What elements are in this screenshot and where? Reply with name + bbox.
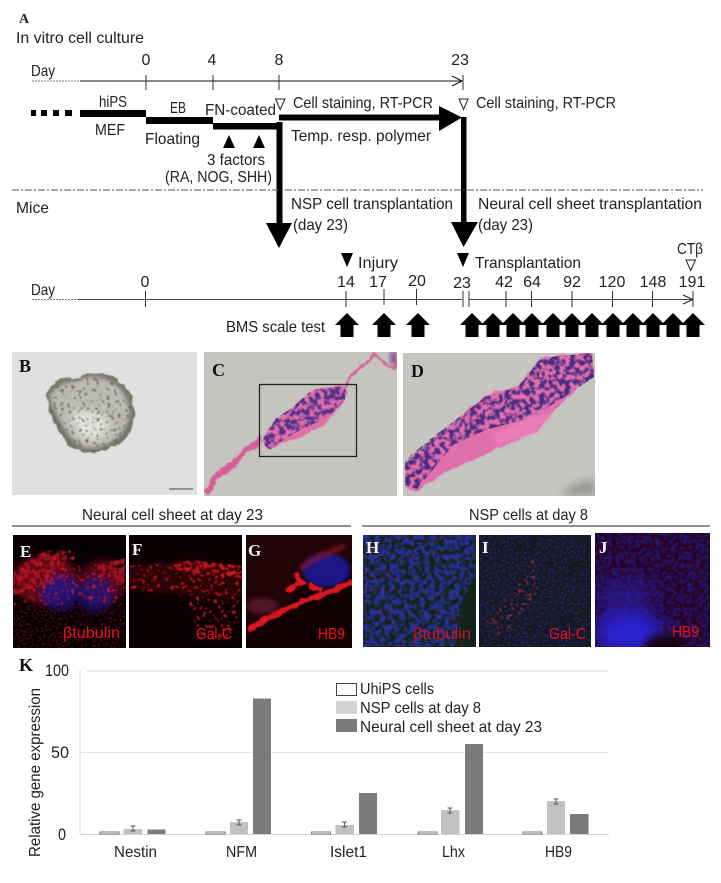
category labels: HB9: [545, 844, 572, 861]
mouse day axis: Day: [31, 282, 55, 299]
panel H: beta tubulin stain day 8: [363, 535, 476, 647]
three factors markers: (RA, NOG, SHH): [165, 169, 272, 186]
panel G: HB9 stain: [246, 535, 352, 648]
mouse day axis: 0: [141, 274, 150, 291]
inset box: [260, 384, 356, 456]
culture stage labels: Temp. resp. polymer: [291, 128, 432, 145]
staining at day 8: Cell staining, RT-PCR: [293, 95, 433, 112]
letter I: I: [482, 538, 489, 557]
letter B: B: [19, 356, 31, 376]
mouse day axis: 64: [523, 274, 541, 291]
three factors markers: 3 factors: [207, 152, 265, 169]
panel B: embryoid body micrograph: [12, 352, 197, 495]
mouse day axis: 92: [563, 274, 581, 291]
mouse day axis: 120: [599, 274, 625, 291]
culture stage labels: hiPS: [99, 94, 127, 111]
three factors markers: [165, 135, 272, 186]
injury marker: Injury: [358, 255, 398, 272]
CT beta marker: CTβ: [677, 241, 703, 258]
mouse day axis: 23: [453, 275, 471, 292]
category labels: Islet1: [330, 844, 367, 861]
in vitro day axis: Day: [31, 63, 55, 80]
letter G: G: [248, 541, 261, 560]
panel D: magnified stained section: [403, 353, 595, 496]
mouse day axis: 17: [369, 274, 387, 291]
transplantation marker: Transplantation: [475, 255, 581, 272]
letter E: E: [20, 542, 31, 561]
letter K: K: [19, 655, 33, 675]
culture stage labels: EB: [170, 100, 186, 117]
culture stage labels: [95, 94, 432, 148]
sheet transplantation label: [478, 196, 702, 234]
error bars: [130, 799, 558, 831]
bars: UhiPS cells: [100, 832, 542, 834]
panel F: Gal-C stain: [129, 535, 242, 648]
in vitro day axis: 4: [208, 52, 217, 69]
letter C: C: [212, 360, 225, 380]
panel E: beta tubulin stain: [13, 535, 126, 648]
legend: UhiPS cells: [360, 681, 434, 698]
panel I: Gal-C stain day 8: [479, 535, 591, 647]
NSP transplantation label: NSP cell transplantation: [291, 196, 453, 213]
sheet transplantation label: Neural cell sheet transplantation: [478, 196, 702, 213]
NSP transplantation label: (day 23): [293, 217, 348, 234]
panel letter A: A: [19, 12, 30, 27]
label: HB9: HB9: [672, 624, 699, 641]
bars: neural cell sheet at day 23: [148, 698, 588, 834]
letter D: D: [411, 361, 424, 381]
label: Gal-C: Gal-C: [196, 626, 232, 643]
arrow: neural cell sheet transplantation: [451, 117, 478, 247]
y axis: 50: [51, 743, 69, 762]
sheet transplantation label: (day 23): [478, 217, 533, 234]
mouse day axis: 191: [679, 274, 705, 291]
category labels: NFM: [226, 844, 257, 861]
label: beta tubulin: βtubulin: [413, 626, 471, 643]
y axis: Relative gene expression: [27, 688, 44, 857]
category labels: Lhx: [442, 844, 465, 861]
panel J: HB9 stain day 8: [595, 533, 710, 647]
CT beta marker: [677, 241, 703, 270]
staining at day 23: Cell staining, RT-PCR: [476, 95, 616, 112]
legend: Neural cell sheet at day 23: [360, 719, 542, 736]
NSP transplantation label: [291, 196, 453, 234]
panel A: experimental timeline: [12, 12, 705, 337]
legend: [336, 681, 542, 736]
y axis: [27, 661, 609, 857]
culture stage labels: MEF: [95, 122, 125, 139]
section heading: neural cell sheet: Neural cell sheet at day 23: [82, 507, 263, 524]
heading: mice: Mice: [16, 200, 49, 217]
mouse day axis: 148: [640, 274, 666, 291]
injury marker: [341, 253, 398, 272]
mouse day axis: [31, 273, 705, 307]
culture stage labels: Floating: [145, 131, 200, 148]
BMS test block arrows: [335, 313, 705, 337]
heading: in vitro cell culture: In vitro cell culture: [16, 30, 144, 47]
culture stage labels: FN-coated: [205, 102, 276, 119]
section heading: NSP cells: NSP cells at day 8: [469, 507, 588, 524]
y axis: 0: [58, 825, 66, 844]
label: HB9: HB9: [318, 626, 345, 643]
category labels: [114, 844, 572, 861]
label: Gal-C: Gal-C: [549, 626, 586, 643]
in vitro day axis: 8: [275, 52, 284, 69]
panel K: gene expression bar chart: [19, 655, 609, 861]
label: beta tubulin: βtubulin: [63, 625, 120, 642]
in vitro day axis: 23: [451, 52, 469, 69]
mouse day axis: 42: [495, 274, 513, 291]
panel C: stained section micrograph: [204, 352, 397, 496]
letter F: F: [132, 540, 142, 559]
arrow: temperature responsive polymer to day 23: [279, 106, 462, 131]
letter H: H: [366, 538, 379, 557]
in vitro day axis: [31, 52, 469, 90]
bars: NSP cells at day 8: [124, 801, 565, 834]
in vitro day axis: 0: [142, 52, 151, 69]
mouse day axis: 14: [337, 274, 355, 291]
BMS scale test label: BMS scale test: [226, 319, 326, 336]
y axis: 100: [45, 661, 69, 680]
mouse day axis: 20: [408, 273, 426, 290]
culture stage bars: [31, 110, 279, 130]
letter J: J: [599, 538, 608, 557]
legend: NSP cells at day 8: [360, 700, 481, 717]
category labels: Nestin: [114, 844, 157, 861]
arrow: NSP cell transplantation: [266, 122, 292, 248]
